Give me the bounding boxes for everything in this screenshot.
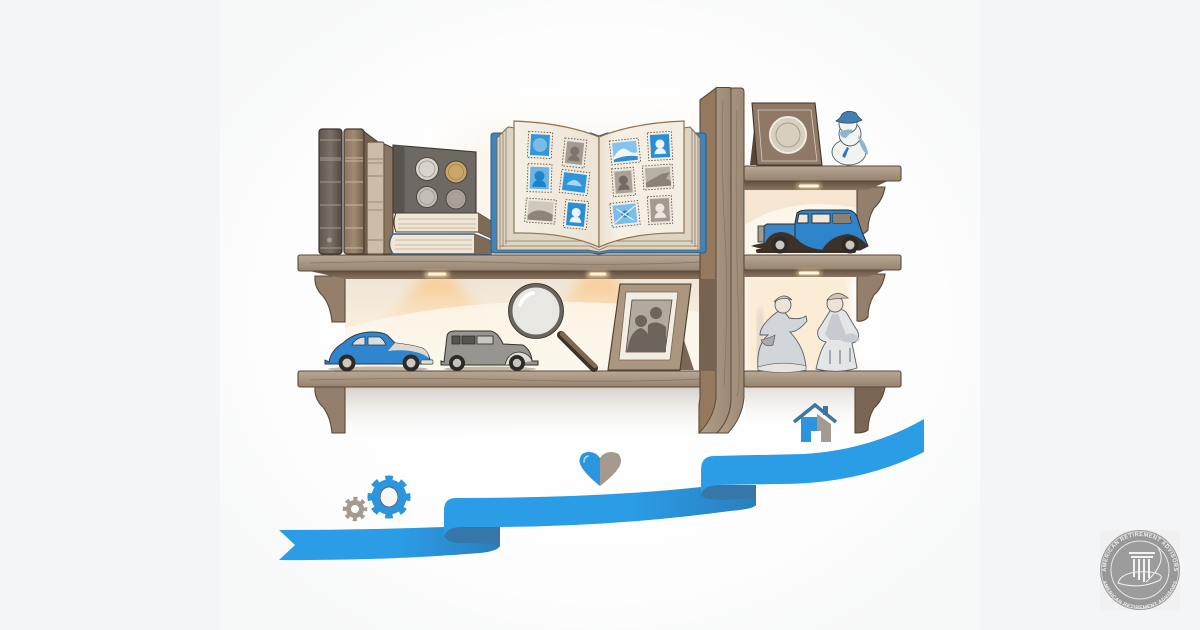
book: dark grey spine bbox=[319, 129, 342, 254]
logo: American Retirement Advisors seal: AMERICAN RETIREMENT ADVISORS bbox=[1102, 581, 1177, 609]
stamp grey landscape bbox=[525, 198, 556, 224]
stamp blue crest bbox=[559, 169, 590, 196]
ribbon fold: second bbox=[701, 485, 756, 500]
top left shelf bbox=[298, 255, 715, 279]
illustration: collectibles on wooden shelves bbox=[220, 0, 1180, 628]
upper right shelf bbox=[744, 166, 901, 190]
book: brown spine bbox=[344, 129, 378, 254]
ribbon segment: middle bbox=[444, 485, 756, 536]
shelf lights bbox=[425, 272, 609, 277]
panel: left shelves bbox=[298, 255, 715, 433]
logo: American Retirement Advisors seal: AMERICAN RETIREMENT ADVISORS bbox=[1102, 532, 1178, 572]
panel: vertical post bbox=[699, 87, 744, 433]
stamp grey bust right bbox=[647, 195, 673, 225]
ribbon segment: tail bbox=[279, 527, 500, 560]
stamp grey silhouette right bbox=[612, 167, 635, 197]
top left shelf bracket bbox=[315, 276, 345, 322]
stamp blue emblem bbox=[610, 201, 640, 227]
album blue cover bbox=[491, 133, 706, 254]
coin album bbox=[393, 145, 476, 213]
porcelain figurine: lady in shawl bbox=[816, 293, 860, 371]
stamp grey silhouette bbox=[562, 138, 587, 168]
icon: half blue half grey heart bbox=[580, 452, 621, 486]
wall glow and shadows behind shelves bbox=[345, 190, 862, 420]
middle right bracket bbox=[857, 274, 885, 321]
stamp blue silhouette bbox=[527, 164, 552, 192]
stamp grey landscape right bbox=[642, 164, 674, 190]
left page bbox=[514, 121, 599, 247]
upright leather books bbox=[319, 129, 393, 254]
coins bbox=[416, 158, 467, 209]
stack of two books bbox=[390, 213, 491, 254]
ribbon fold: first bbox=[444, 527, 500, 546]
stamp blue landscape bbox=[609, 138, 641, 165]
book: cream spine bbox=[367, 142, 393, 254]
toy car: blue vintage sedan bbox=[751, 210, 868, 254]
page stack bbox=[497, 127, 700, 252]
toy car: grey sedan bbox=[441, 331, 538, 372]
panel: right shelves bbox=[744, 166, 901, 433]
right page bbox=[599, 121, 684, 247]
porcelain snowman bbox=[832, 111, 868, 165]
icon: small grey gear bbox=[344, 498, 366, 520]
icon: large blue gear bbox=[370, 478, 408, 516]
stamp album bbox=[491, 121, 706, 254]
stamp blue pattern bbox=[527, 131, 553, 159]
upper right bracket bbox=[857, 187, 885, 235]
top book bbox=[394, 213, 491, 238]
lower left shelf bbox=[298, 371, 715, 387]
lower right shelf bbox=[744, 371, 901, 387]
lower right bracket bbox=[855, 387, 885, 433]
toy car: blue coupe bbox=[325, 332, 433, 372]
magnifying glass bbox=[508, 284, 595, 368]
blue ribbon bbox=[279, 419, 924, 560]
framed silver coin bbox=[750, 103, 822, 165]
ribbon segment: right bbox=[701, 419, 924, 495]
logo column emblem bbox=[1118, 548, 1161, 586]
bottom book bbox=[390, 234, 491, 254]
right shelf lights bbox=[797, 184, 821, 275]
stamp blue bust right bbox=[647, 131, 673, 161]
framed couple photograph bbox=[608, 284, 694, 370]
lower left shelf bracket bbox=[315, 387, 345, 433]
porcelain figurine: lady with basket bbox=[758, 296, 807, 372]
middle right shelf bbox=[744, 255, 901, 277]
icon: house bbox=[794, 405, 836, 442]
logo: American Retirement Advisors seal bbox=[1100, 530, 1180, 610]
stamp blue bust bbox=[563, 200, 589, 229]
